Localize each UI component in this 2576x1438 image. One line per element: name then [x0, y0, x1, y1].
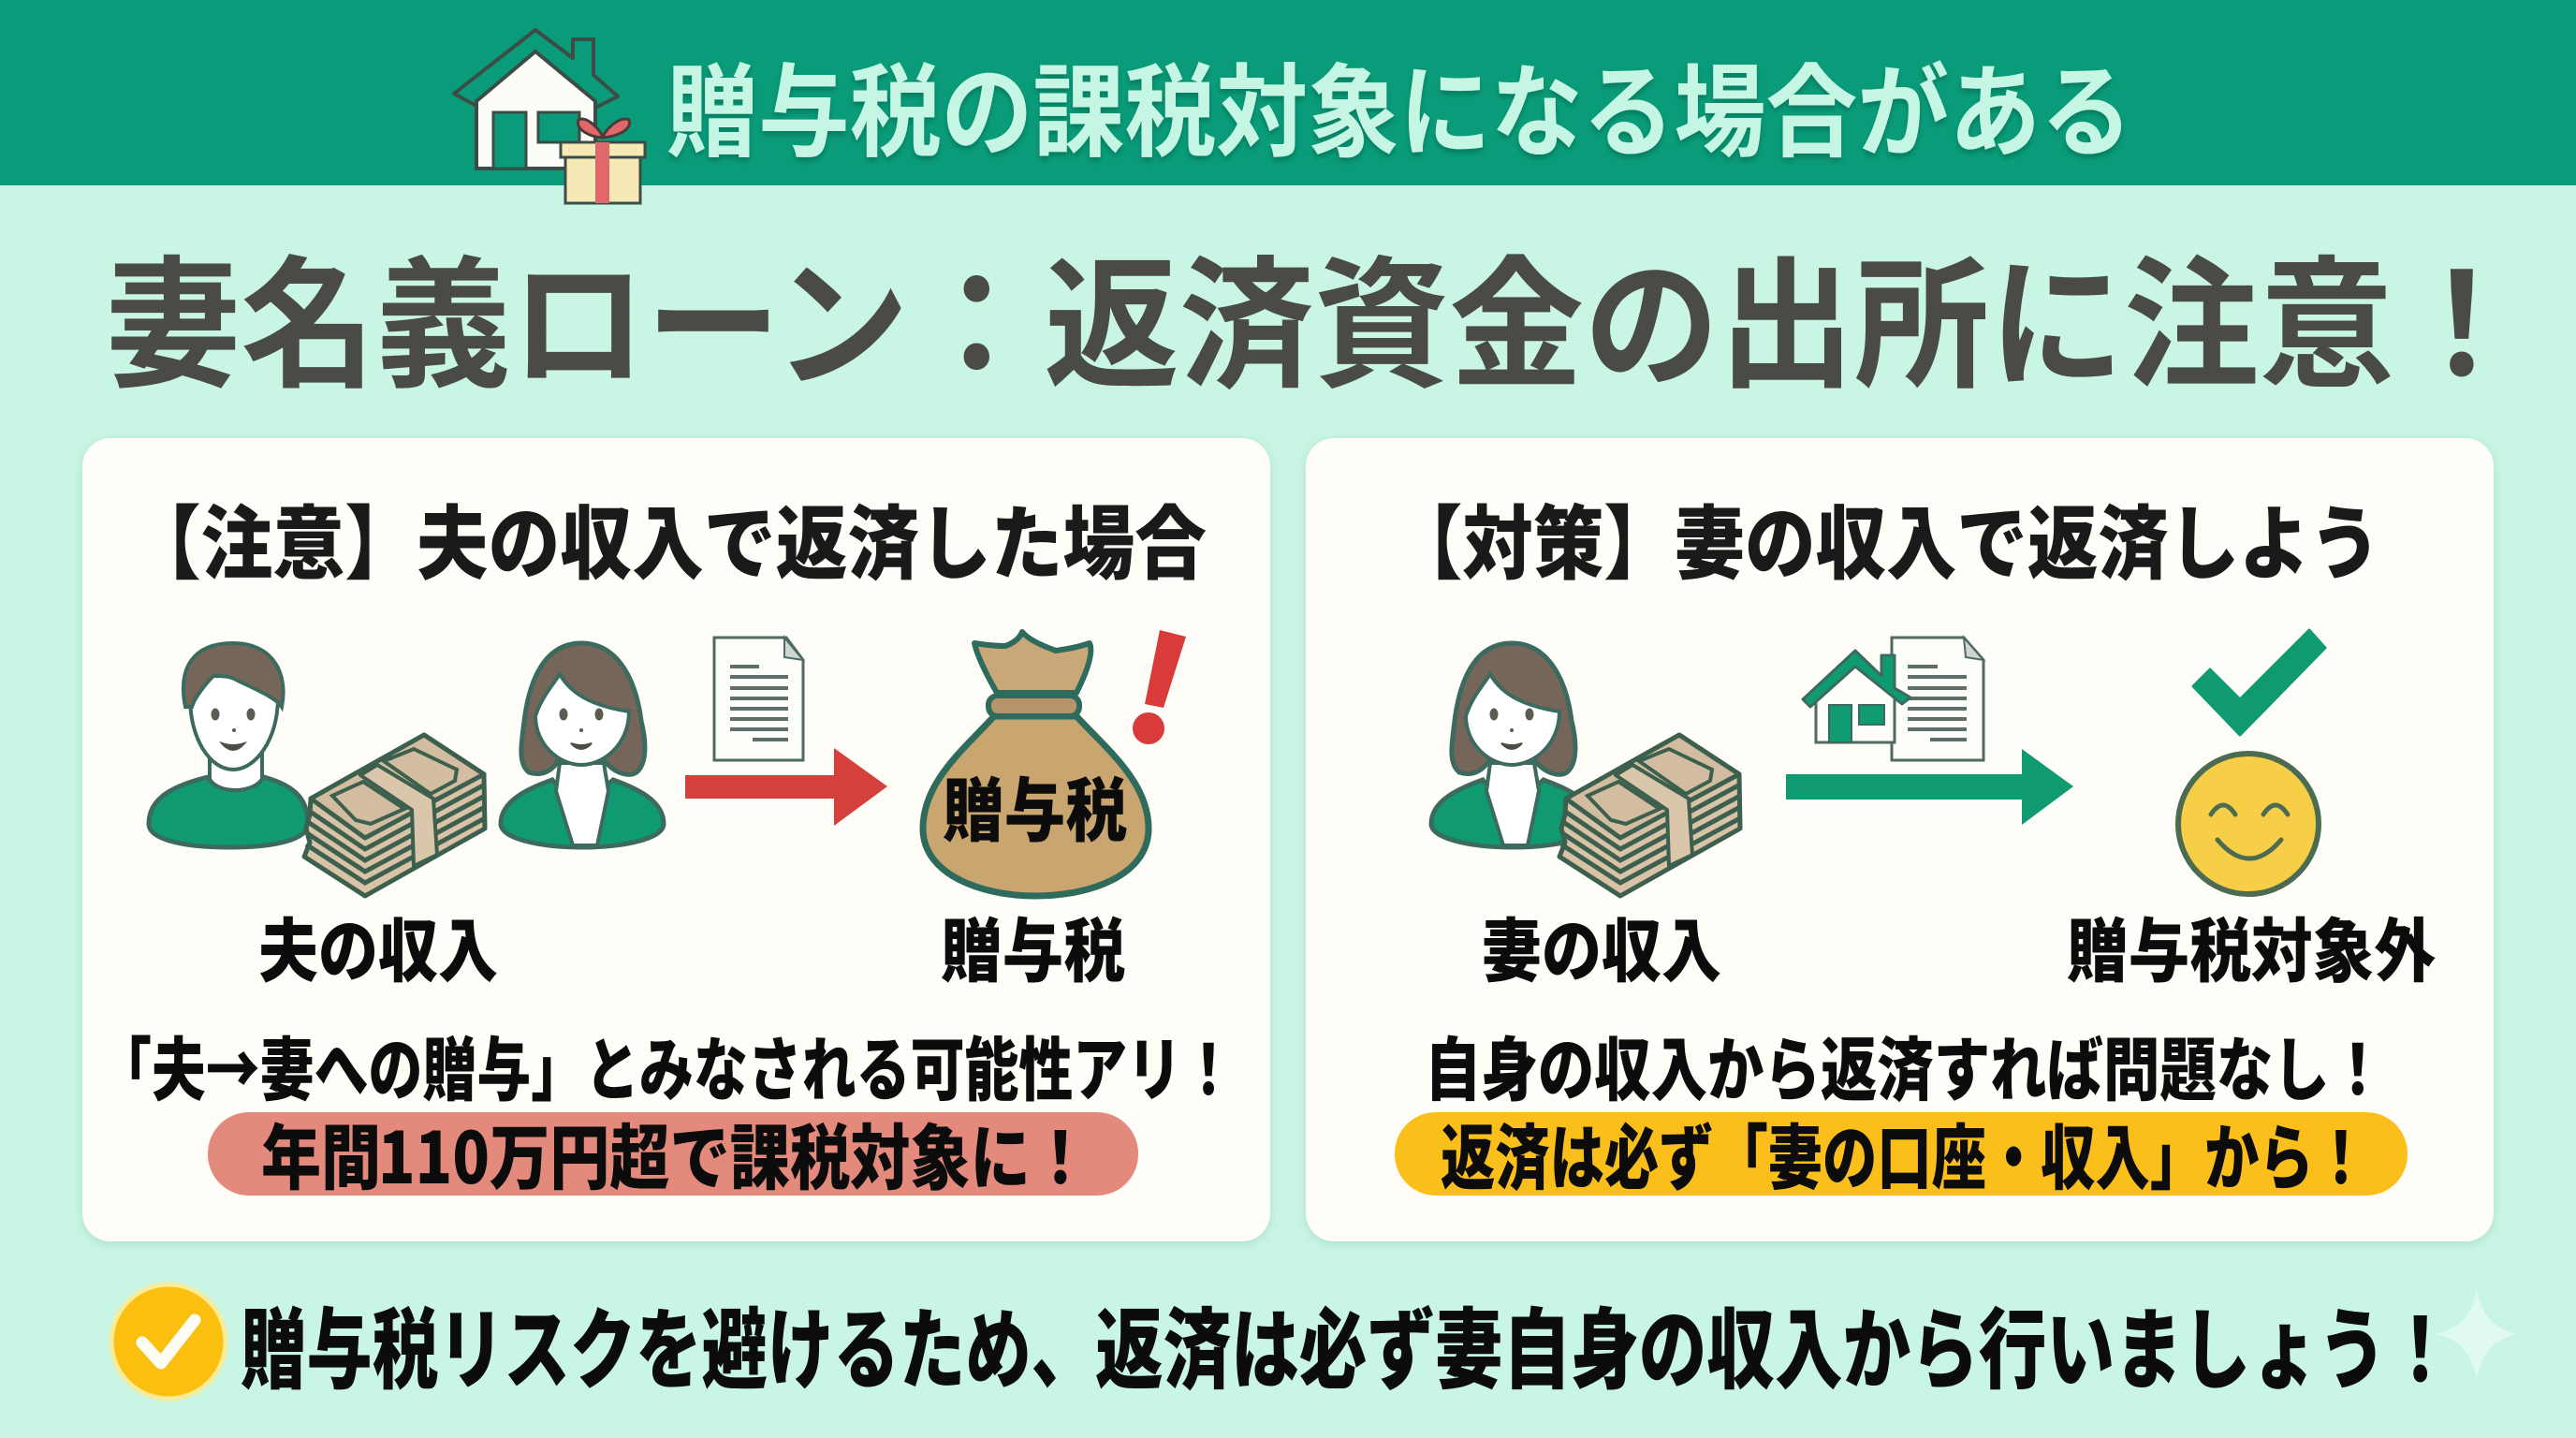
panel background — [1306, 438, 2494, 1241]
icon: wife — [1431, 643, 1594, 847]
icon: document — [714, 638, 803, 760]
icon: house with gift — [454, 30, 645, 203]
icon: yellow check badge — [111, 1284, 226, 1399]
callout: red pill: 万円超で課税対象に！ — [490, 1101, 1090, 1204]
header band — [0, 0, 2576, 185]
icon: exclamation mark — [1133, 630, 1186, 744]
statement: 「夫→妻への贈与」とみなされる可能性アリ！ — [97, 1015, 1236, 1115]
label: outside gift tax: 贈与税対象外 — [2067, 896, 2436, 996]
label: gift tax: 贈与税 — [941, 896, 1125, 996]
icon: money stack — [304, 735, 485, 896]
panel: caution — [82, 438, 1270, 1241]
panel background — [82, 438, 1270, 1241]
icon: document with house — [1803, 638, 1983, 760]
callout: red pill: 110 — [378, 1101, 490, 1204]
panel heading: 【注意】夫の収入で返済した場合 — [129, 478, 1207, 595]
icon: wife — [501, 643, 664, 847]
panel: countermeasure — [1306, 438, 2494, 1241]
icon: money bag — [923, 632, 1149, 896]
bottom message: 贈与税リスクを避けるため、 — [241, 1280, 1097, 1407]
panel heading: 【対策】妻の収入で返済しよう — [1392, 478, 2380, 595]
label: husband income: 夫の収入 — [258, 896, 498, 996]
icon: husband — [149, 643, 308, 847]
bottom message — [241, 1280, 2454, 1407]
bag label: 贈与税 — [943, 756, 1127, 856]
callout: red pill — [208, 1101, 1138, 1204]
icon: money stack — [1559, 735, 1740, 896]
callout: red pill: 年間 — [261, 1101, 381, 1204]
icon: sparkle — [2436, 1289, 2517, 1379]
label: wife income: 妻の収入 — [1482, 896, 1721, 996]
statement: 自身の収入から返済すれば問題なし！ — [1425, 1015, 2386, 1115]
icon: smiling face — [2178, 754, 2319, 894]
arrow: green — [1786, 749, 2073, 825]
header title: 贈与税の課税対象になる場合がある — [666, 32, 2132, 178]
icon: check mark — [2193, 630, 2325, 735]
arrow: red — [685, 748, 887, 826]
